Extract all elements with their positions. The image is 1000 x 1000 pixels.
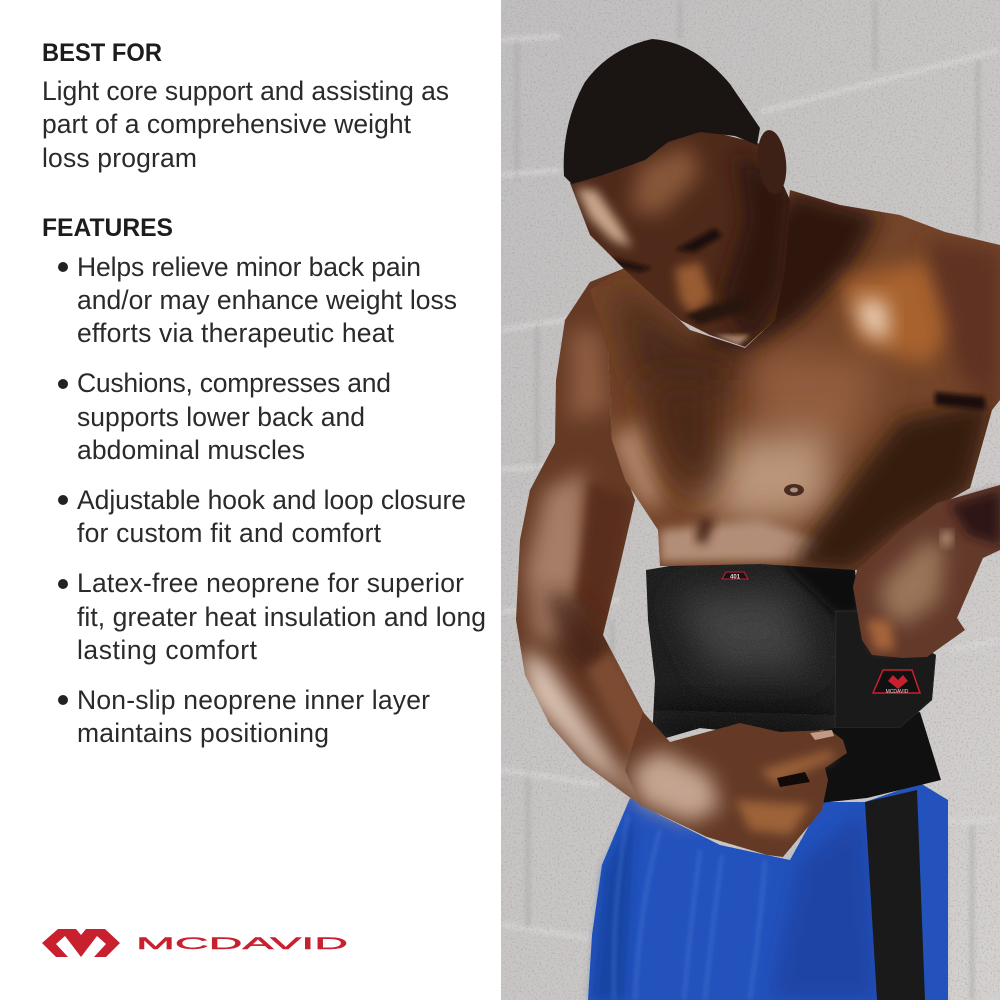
heading: features: FEATURES (42, 214, 173, 242)
feature bullet 2: Cushions, compresses and (77, 368, 391, 398)
feature bullet 3 (58, 485, 466, 548)
belt logo patch (873, 670, 920, 695)
feature bullet 1: efforts via therapeutic heat (77, 318, 395, 348)
hair (564, 39, 760, 184)
best for description: loss program (42, 143, 197, 173)
feature bullet 1 (58, 252, 457, 348)
heading: best for: BEST FOR (42, 39, 162, 67)
face (570, 130, 790, 347)
feature bullet 5: maintains positioning (77, 718, 329, 748)
head (564, 39, 795, 347)
right hand on belt (853, 485, 1000, 658)
waist trimmer belt (640, 560, 941, 803)
feature bullet 3: Adjustable hook and loop closure (77, 485, 466, 515)
feature bullet 4: fit, greater heat insulation and long (77, 602, 486, 632)
feature bullet 1: Helps relieve minor back pain (77, 252, 421, 282)
left arm (516, 268, 644, 804)
feature bullet 5 (58, 685, 430, 748)
feature bullet 4: Latex-free neoprene for superior (77, 568, 464, 598)
man body (501, 190, 1000, 820)
belt label 401 (722, 572, 748, 580)
feature bullet 5: Non-slip neoprene inner layer (77, 685, 430, 715)
best for description: Light core support and assisting as (42, 76, 449, 106)
feature bullet 2 (58, 368, 391, 465)
feature bullet 2: supports lower back and (77, 402, 365, 432)
feature bullet 4: lasting comfort (77, 635, 258, 665)
lower belt band (823, 712, 941, 803)
belt logo patch: MCDAVID (886, 689, 909, 695)
text panel background (0, 0, 501, 1000)
logo mark (42, 929, 120, 957)
section: best for (42, 39, 449, 173)
concrete block wall (501, 0, 1000, 1000)
McDavid logo (42, 929, 348, 957)
belt flap (835, 611, 936, 728)
torso shading (610, 190, 1000, 572)
photo: athlete fitting a neoprene waist trimmer (501, 0, 1000, 1000)
left hand holding belt (625, 712, 847, 857)
feature bullet 2: abdominal muscles (77, 435, 305, 465)
belt label 401: 401 (730, 574, 741, 580)
best for description: part of a comprehensive weight (42, 109, 412, 139)
feature bullet 4 (58, 568, 486, 665)
torso (590, 190, 1000, 570)
ear (758, 130, 786, 194)
feature bullet 1: and/or may enhance weight loss (77, 285, 457, 315)
logo wordmark: MCDAVID (136, 934, 348, 953)
best for description (42, 76, 449, 173)
shorts black stripe (865, 790, 925, 1000)
section: features (42, 214, 486, 748)
shorts (588, 783, 948, 1000)
feature bullet 3: for custom fit and comfort (77, 518, 382, 548)
